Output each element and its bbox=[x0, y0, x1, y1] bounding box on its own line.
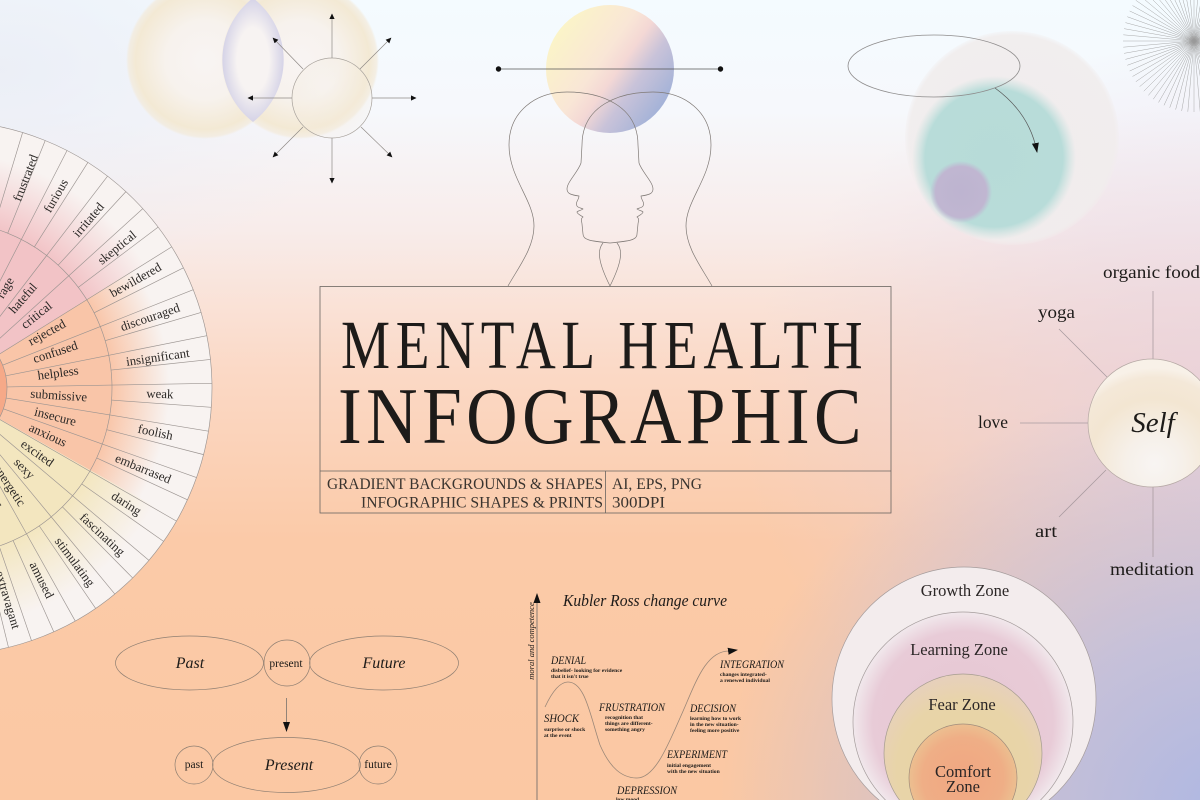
subtitle right column: AI, EPS, PNG bbox=[612, 476, 702, 493]
curved arrow bbox=[995, 88, 1037, 152]
stage: integration: a renewed individual bbox=[720, 678, 770, 684]
fear zone bbox=[884, 674, 1042, 800]
stage: frustration: something angry bbox=[605, 727, 645, 733]
outer emotion labels: discouraged bbox=[119, 300, 182, 334]
stage: frustration bbox=[598, 702, 666, 733]
top row shapes bbox=[116, 636, 458, 690]
small center circle bbox=[292, 58, 372, 138]
spoke labels: meditation bbox=[1110, 559, 1194, 579]
outer emotion labels: insignificant bbox=[125, 346, 191, 369]
stage: denial: disbelief- looking for evidence bbox=[551, 668, 623, 674]
outer emotion labels: weak bbox=[146, 387, 174, 401]
bottom row labels: past bbox=[185, 759, 204, 771]
title: mental health: MENTAL HEALTH bbox=[341, 306, 863, 383]
top row labels: Future bbox=[362, 655, 405, 672]
inner emotion labels: sexy bbox=[11, 455, 38, 482]
bottom row labels: future bbox=[364, 759, 392, 771]
outer emotion labels: amused bbox=[27, 559, 57, 601]
inner emotion labels: helpless bbox=[37, 363, 79, 383]
zone labels: Growth Zone bbox=[921, 581, 1009, 600]
change curve bbox=[545, 650, 737, 778]
venn diagram with radiating arrows bbox=[126, 0, 416, 183]
self circle bbox=[1088, 359, 1200, 487]
top row labels: present bbox=[269, 658, 303, 670]
spoke labels: love bbox=[978, 412, 1008, 432]
inner emotion labels: submissive bbox=[30, 387, 88, 404]
outer emotion labels: fascinating bbox=[77, 510, 128, 559]
comfort zone diagram bbox=[832, 567, 1096, 800]
inner emotion labels: critical bbox=[18, 298, 55, 332]
gradient sphere bbox=[546, 5, 674, 133]
stage: decision bbox=[689, 703, 742, 734]
learning zone bbox=[853, 612, 1073, 800]
subtitle right column: 300DPI bbox=[612, 494, 665, 512]
stage: decision: learning how to work bbox=[690, 716, 742, 722]
radiating arrows bbox=[248, 14, 416, 183]
teal blur bbox=[912, 76, 1076, 240]
stage: decision: feeling more positive bbox=[690, 728, 740, 734]
growth zone bbox=[832, 567, 1096, 800]
stage: denial: DENIAL bbox=[550, 655, 586, 667]
stage: shock bbox=[544, 713, 586, 739]
spoke labels: yoga bbox=[1038, 302, 1075, 322]
inner emotion labels: excited bbox=[18, 437, 57, 470]
outer emotion labels: skeptical bbox=[95, 228, 139, 267]
stage: integration bbox=[719, 659, 785, 684]
inner emotion labels: hateful bbox=[6, 280, 40, 316]
self care diagram bbox=[978, 262, 1200, 579]
stage: frustration: things are different- bbox=[605, 721, 653, 727]
spoke labels: art bbox=[1035, 521, 1057, 541]
outer emotion labels: stimulating bbox=[52, 535, 98, 590]
venn right circle bbox=[221, 0, 379, 139]
y axis label: moral and competence bbox=[526, 602, 536, 680]
subtitle left column bbox=[327, 476, 603, 512]
self label: Self bbox=[1131, 407, 1179, 439]
emotion wheel bbox=[0, 126, 212, 650]
outer emotion labels: embarrased bbox=[113, 451, 174, 487]
top row labels bbox=[175, 655, 405, 672]
venn left circle bbox=[126, 0, 284, 139]
subtitle right column bbox=[612, 476, 702, 512]
stage: decision: in the new situation- bbox=[690, 722, 739, 728]
stage: experiment bbox=[666, 749, 728, 775]
large pale sphere bbox=[905, 31, 1119, 245]
stage: experiment: EXPERIMENT bbox=[666, 749, 728, 761]
title box bbox=[320, 286, 891, 513]
title: infographic: INFOGRAPHIC bbox=[338, 371, 862, 461]
stage: experiment: initial engagement bbox=[667, 763, 711, 769]
outer emotion labels: bewildered bbox=[107, 260, 164, 300]
inner emotion labels: insecure bbox=[33, 405, 78, 429]
subtitle left column: INFOGRAPHIC SHAPES & PRINTS bbox=[361, 494, 603, 512]
kubler ross change curve bbox=[526, 591, 785, 800]
outer emotion labels: irritated bbox=[70, 200, 107, 240]
wheel colored rings bbox=[0, 127, 212, 649]
y axis bbox=[536, 594, 538, 800]
stage: frustration: FRUSTRATION bbox=[598, 702, 666, 714]
outer emotion labels: daring bbox=[109, 489, 144, 519]
comfort zone bbox=[909, 724, 1017, 800]
horizontal line with dots bbox=[496, 66, 723, 72]
past present future diagram bbox=[116, 636, 458, 792]
zone labels bbox=[910, 581, 1009, 796]
stage: shock: at the event bbox=[544, 733, 572, 739]
chart title: Kubler Ross change curve bbox=[562, 591, 727, 610]
inner emotion labels: rejected bbox=[26, 317, 69, 348]
stage: experiment: with the new situation bbox=[667, 769, 721, 775]
bottom row shapes bbox=[175, 738, 397, 792]
outer emotion labels bbox=[0, 152, 191, 631]
inner emotion labels bbox=[0, 274, 88, 511]
stage: frustration: recognition that bbox=[605, 715, 643, 721]
stage: integration: changes integrated- bbox=[720, 672, 767, 678]
stage: denial: that it isn't true bbox=[551, 674, 589, 680]
subtitle left column: GRADIENT BACKGROUNDS & SHAPES bbox=[327, 476, 603, 493]
zone labels: Learning Zone bbox=[910, 640, 1008, 659]
two mirrored head profiles bbox=[508, 92, 712, 286]
sunburst bbox=[1123, 0, 1200, 112]
outer emotion labels: frustrated bbox=[10, 152, 41, 203]
bottom row labels bbox=[185, 757, 392, 774]
outer emotion labels: foolish bbox=[137, 422, 175, 443]
stage: decision: DECISION bbox=[689, 703, 737, 715]
spoke labels: organic food bbox=[1103, 262, 1200, 282]
zone labels: Fear Zone bbox=[928, 695, 996, 714]
stage: shock: surprise or shock bbox=[544, 727, 586, 733]
zone labels: Comfort bbox=[935, 762, 991, 781]
bottom row labels: Present bbox=[264, 757, 314, 774]
stage: shock: SHOCK bbox=[544, 713, 580, 725]
stage: denial bbox=[550, 655, 623, 680]
spoke labels bbox=[978, 262, 1200, 579]
spokes bbox=[1020, 291, 1153, 557]
inner emotion labels: anxious bbox=[27, 420, 69, 450]
head illustration bbox=[496, 5, 723, 286]
stage: integration: INTEGRATION bbox=[719, 659, 785, 671]
zone labels: Zone bbox=[946, 777, 980, 796]
wheel spokes and rims bbox=[0, 121, 212, 655]
purple small sphere bbox=[930, 161, 992, 223]
down arrow bbox=[286, 698, 288, 731]
inner emotion labels: confused bbox=[31, 338, 80, 366]
box frame and dividers bbox=[320, 286, 891, 513]
stage: depression: DEPRESSION bbox=[616, 785, 678, 797]
halo ellipse bbox=[848, 35, 1020, 97]
outer emotion labels: furious bbox=[41, 177, 71, 215]
venn overlap lens bbox=[222, 0, 284, 122]
top row labels: Past bbox=[175, 655, 205, 672]
sphere with halo and arrow bbox=[848, 31, 1119, 245]
